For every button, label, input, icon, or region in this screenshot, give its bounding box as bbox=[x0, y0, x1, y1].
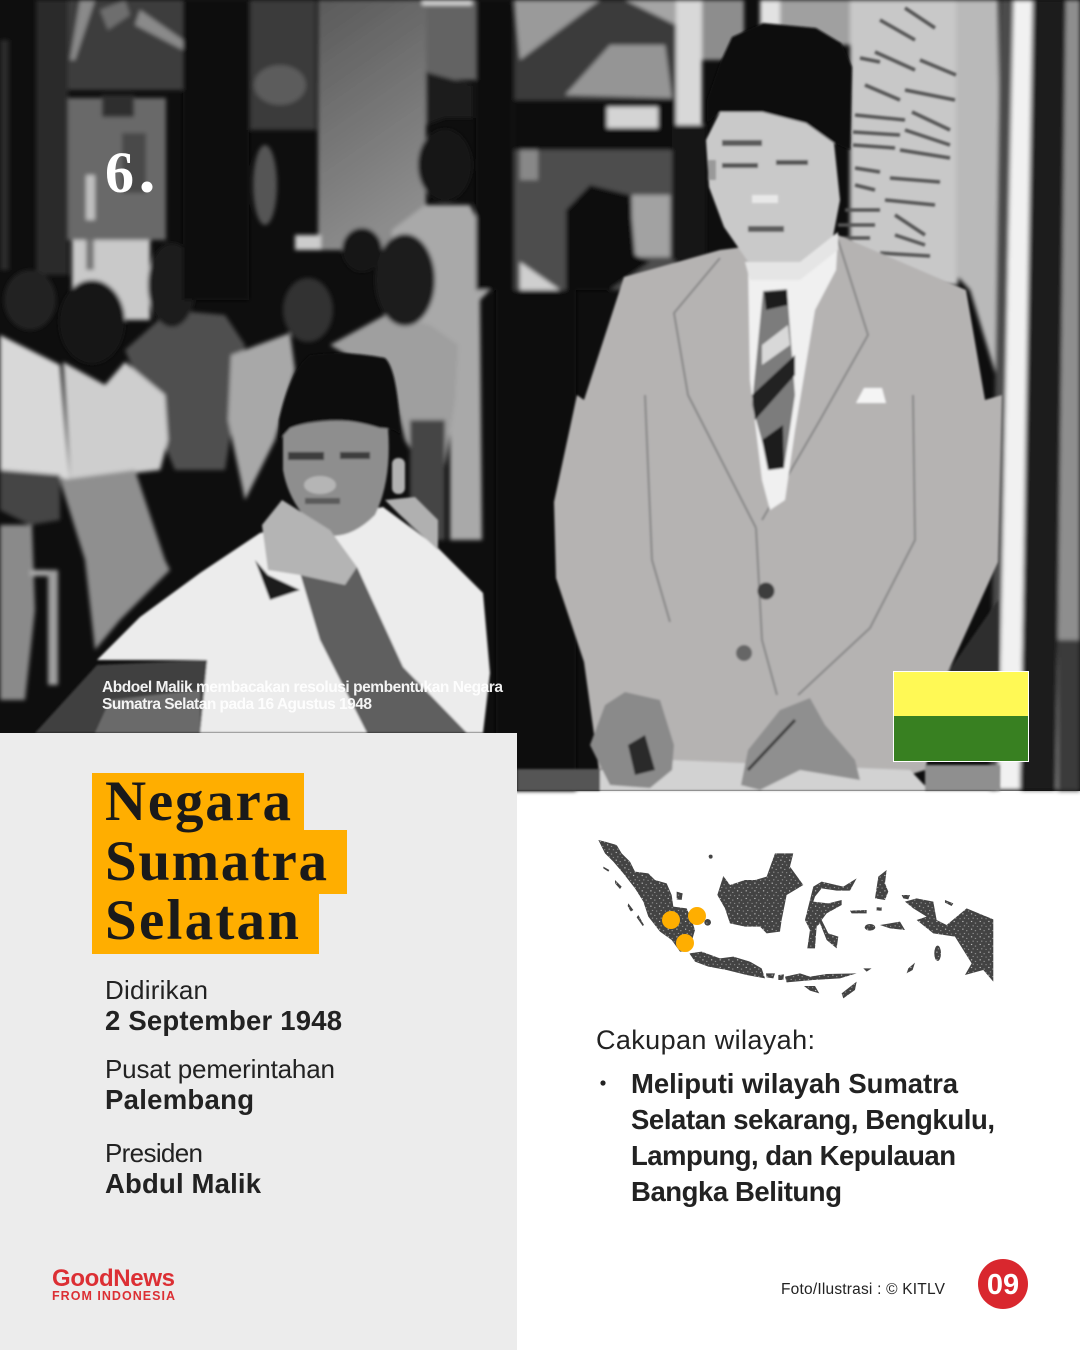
photo caption: Sumatra Selatan pada 16 Agustus 1948 bbox=[102, 696, 372, 713]
seated man face bbox=[283, 420, 389, 536]
fact: president: Abdul Malik bbox=[105, 1168, 262, 1199]
speaker suit bbox=[554, 235, 1002, 790]
fact: seat of government bbox=[105, 1054, 335, 1115]
logo: GoodNews from Indonesia: GoodNews bbox=[52, 1265, 175, 1292]
table bbox=[517, 769, 607, 791]
text block: territory coverage: Cakupan wilayah: bbox=[596, 1025, 815, 1055]
seated man arm bbox=[300, 567, 467, 733]
fact: seat of government: Pusat pemerintahan bbox=[105, 1054, 335, 1084]
text block: territory coverage: Meliputi wilayah Sumatra bbox=[631, 1068, 959, 1099]
fact: president: Presiden bbox=[105, 1138, 203, 1168]
audience standing man bbox=[390, 205, 495, 540]
text block: territory coverage: Bangka Belitung bbox=[631, 1176, 842, 1207]
island: Timor and Sumba bbox=[804, 986, 819, 993]
jacket buttons bbox=[758, 582, 774, 600]
text block: territory coverage: Selatan sekarang, Bengkulu, bbox=[631, 1104, 995, 1135]
heading: state name: Selatan bbox=[105, 889, 299, 952]
speaker hands bbox=[590, 692, 674, 788]
fact: president bbox=[105, 1138, 262, 1199]
flag bbox=[893, 671, 1029, 762]
pocket square bbox=[856, 388, 886, 403]
photo credit: Foto/Ilustrasi : © KITLV bbox=[781, 1281, 946, 1298]
island: Kalimantan bbox=[717, 853, 803, 933]
background building right of post bbox=[514, 0, 676, 100]
marker: Bengkulu bbox=[662, 911, 680, 929]
page number badge bbox=[978, 1259, 1028, 1309]
fact: seat of government: Palembang bbox=[105, 1084, 254, 1115]
map: Indonesia with marked regions bbox=[598, 840, 993, 998]
island: Papua bbox=[905, 898, 993, 982]
text block: territory coverage bbox=[596, 1025, 995, 1207]
fact: founding date: 2 September 1948 bbox=[105, 1005, 342, 1036]
seated man hand bbox=[262, 500, 357, 585]
speaker face bbox=[706, 112, 840, 263]
shirt and tie bbox=[748, 235, 838, 510]
curtain folds bbox=[838, 8, 956, 256]
photo: Abdoel Malik reading the resolution bbox=[0, 0, 1080, 791]
window frame and wall behind speaker bbox=[676, 0, 702, 125]
marker: Bangka Belitung bbox=[688, 907, 706, 925]
islands: Lesser Sunda bbox=[766, 973, 775, 978]
marker: Lampung bbox=[676, 934, 694, 952]
photo caption: Abdoel Malik membacakan resolusi pembentukan Negara bbox=[102, 679, 503, 696]
heading: state name bbox=[92, 770, 347, 954]
fact: founding date bbox=[105, 975, 342, 1036]
seated man hat bbox=[279, 353, 400, 440]
seated man forearm left bbox=[35, 660, 207, 733]
audience men bbox=[125, 310, 245, 470]
island: Sumatra bbox=[598, 840, 695, 952]
section number bbox=[105, 140, 152, 205]
island: Java bbox=[689, 952, 765, 978]
suit seams bbox=[645, 240, 915, 695]
island: Sulawesi bbox=[805, 878, 857, 948]
speaker cap bbox=[707, 23, 852, 150]
logo: GoodNews from Indonesia: FROM INDONESIA bbox=[52, 1289, 175, 1303]
page number badge: 09 bbox=[987, 1269, 1019, 1301]
panel: state profile bbox=[0, 733, 517, 1350]
photo caption bbox=[102, 679, 503, 713]
section number: 6 bbox=[105, 140, 134, 205]
text block: territory coverage: Lampung, dan Kepulauan bbox=[631, 1140, 956, 1171]
island: Seram and Maluku bbox=[880, 922, 905, 930]
heading: state name: Negara bbox=[105, 770, 291, 833]
dark columns bbox=[183, 0, 249, 300]
heading: state name: Sumatra bbox=[105, 830, 327, 893]
island: Halmahera bbox=[875, 870, 888, 900]
seated man shirt bbox=[97, 507, 490, 733]
fact: founding date: Didirikan bbox=[105, 975, 208, 1005]
